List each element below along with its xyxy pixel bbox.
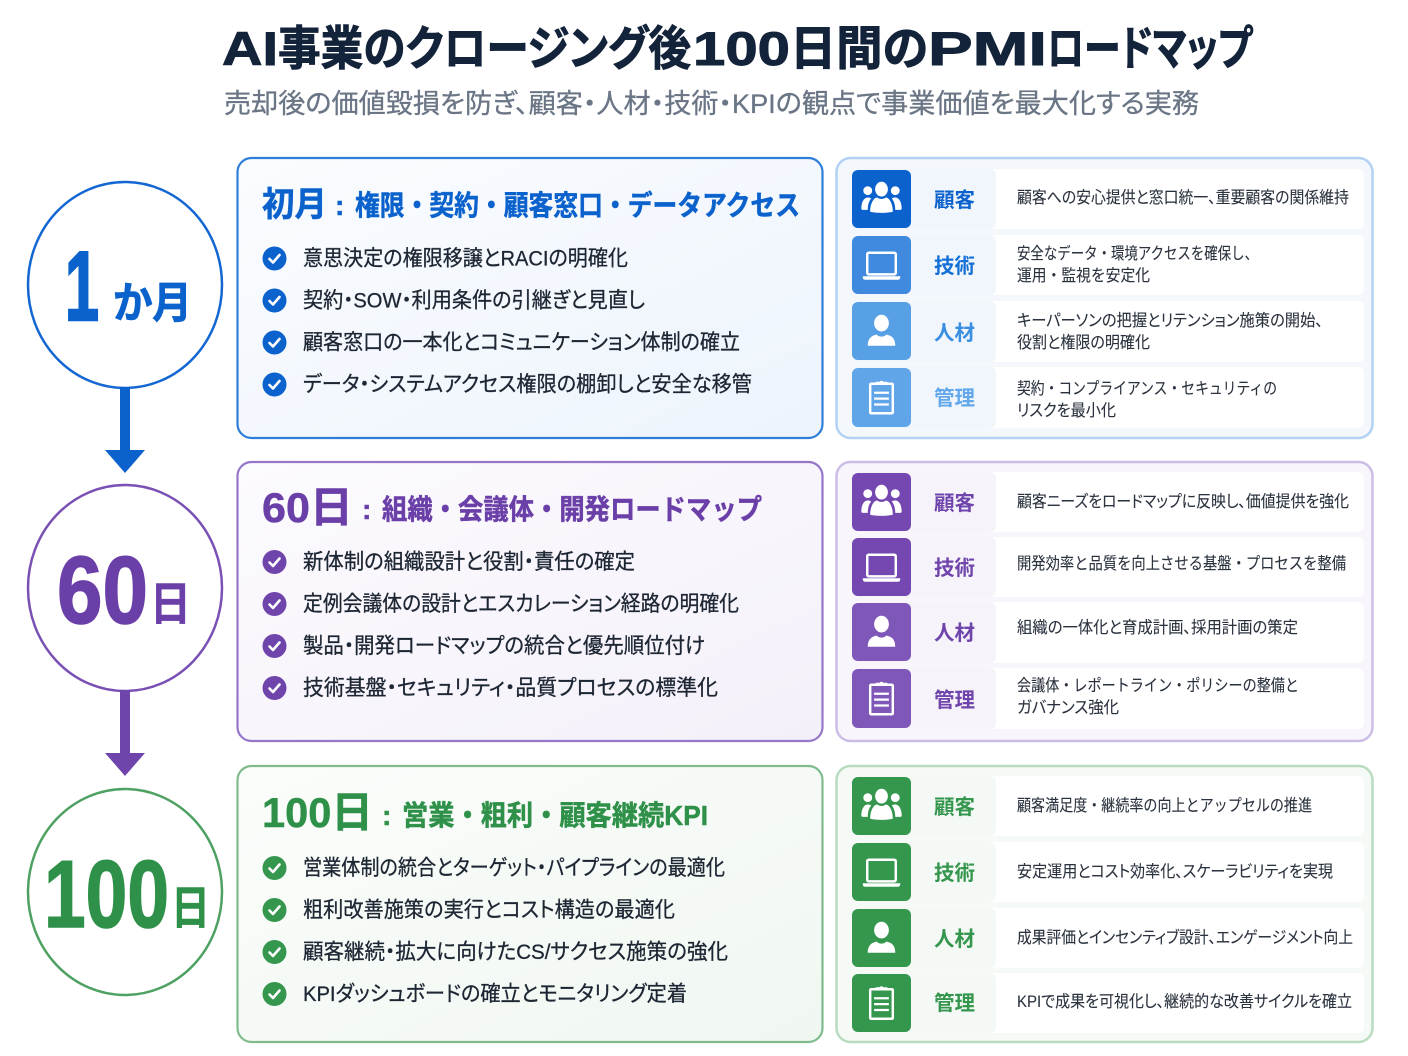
row: customer: 顧客: [934, 189, 975, 212]
row: management: 会議体・レポートライン・ポリシーの整備と: [1017, 676, 1299, 695]
heading: first month: :: [335, 190, 344, 221]
row: technology: [852, 235, 1364, 295]
check item 1: 営業体制の統合とターゲット・パイプラインの最適化: [303, 856, 725, 880]
heading: 60 days: [262, 484, 762, 531]
heading: 100 days: :: [382, 800, 391, 831]
check item 3: 顧客窓口の一本化とコミュニケーション体制の確立: [303, 330, 740, 354]
timeline: 1 month circle: 1: [65, 231, 99, 341]
row: management: KPIで成果を可視化し、継続的な改善サイクルを確立: [1017, 992, 1352, 1011]
check item 1: 意思決定の権限移譲とRACIの明確化: [303, 246, 628, 270]
heading: first month: 権限・契約・顧客窓口・データアクセス: [355, 189, 800, 221]
row: technology: 技術: [934, 556, 975, 580]
check item 4: KPIダッシュボードの確立とモニタリング定着: [303, 982, 687, 1006]
arrow: 1 month to 60 days: [105, 387, 145, 473]
row: management: [852, 973, 1364, 1033]
row: people: 人材: [934, 622, 975, 645]
timeline: 1 month circle: か月: [113, 280, 192, 328]
timeline: 100 days circle: 日: [171, 882, 210, 934]
heading: 60 days: 60日: [262, 484, 353, 531]
timeline: 1 month circle: [28, 182, 222, 388]
row: technology: 技術: [934, 254, 975, 278]
panel: 60 days checklist: [238, 462, 822, 741]
title: 事業のクロージング後: [278, 22, 691, 75]
row: technology: [852, 537, 1364, 597]
timeline: 60 days circle: 60: [57, 537, 148, 644]
row: people: 組織の一体化と育成計画、採用計画の策定: [1017, 618, 1298, 637]
row: technology: 安定運用とコスト効率化、スケーラビリティを実現: [1017, 862, 1333, 881]
panel: 60 days perspectives: [836, 462, 1372, 741]
heading: first month: [262, 186, 800, 224]
row: technology: 安全なデータ・環境アクセスを確保し、: [1017, 243, 1258, 263]
row: customer: 顧客: [934, 796, 975, 819]
row: management: [852, 367, 1364, 428]
row: people: [852, 908, 1364, 968]
row: technology: 開発効率と品質を向上させる基盤・プロセスを整備: [1017, 554, 1346, 573]
row: customer: [852, 776, 1364, 836]
row: people: [852, 602, 1364, 663]
heading: first month: 初月: [262, 186, 327, 224]
arrow: 60 days to 100 days: [105, 690, 145, 776]
row: management: [852, 668, 1364, 729]
check item 4: データ・システムアクセス権限の棚卸しと安全な移管: [303, 372, 752, 396]
check item 3: 製品・開発ロードマップの統合と優先順位付け: [303, 634, 705, 658]
panel: 100 days perspectives: [836, 766, 1372, 1042]
heading: 60 days: 組織・会議体・開発ロードマップ: [382, 494, 762, 525]
timeline: 100 days circle: 100: [44, 841, 169, 948]
row: customer: 顧客: [934, 492, 975, 515]
row: customer: 顧客満足度・継続率の向上とアップセルの推進: [1017, 796, 1312, 815]
title: 日間の: [790, 22, 928, 75]
row: technology: [852, 842, 1364, 902]
title: PMI: [928, 22, 1047, 75]
row: customer: [852, 169, 1364, 229]
row: people: 人材: [934, 928, 975, 951]
row: people: [852, 301, 1364, 362]
check item 2: 定例会議体の設計とエスカレーション経路の明確化: [303, 592, 739, 616]
row: technology: 技術: [934, 861, 975, 885]
heading: 100 days: 100日: [262, 789, 373, 836]
row: management: リスクを最小化: [1017, 401, 1116, 420]
check item 3: 顧客継続・拡大に向けたCS/サクセス施策の強化: [303, 940, 728, 964]
panel: first month perspectives: [836, 158, 1372, 438]
row: people: 人材: [934, 322, 975, 345]
subtitle: 売却後の価値毀損を防ぎ、顧客・人材・技術・KPIの観点で事業価値を最大化する実務: [224, 89, 1199, 119]
row: technology: 運用・監視を安定化: [1017, 266, 1150, 285]
timeline: 60 days circle: [28, 485, 222, 691]
title: [222, 22, 1254, 75]
panel: first month checklist: [238, 158, 822, 438]
row: management: 契約・コンプライアンス・セキュリティの: [1017, 379, 1277, 398]
timeline: 100 days circle: [28, 789, 222, 995]
title: AI: [222, 22, 278, 75]
row: management: ガバナンス強化: [1017, 698, 1119, 717]
panel: 100 days checklist: [238, 766, 822, 1042]
heading: 60 days: :: [362, 494, 371, 525]
check item 4: 技術基盤・セキュリティ・品質プロセスの標準化: [303, 676, 718, 700]
row: customer: 顧客への安心提供と窓口統一、重要顧客の関係維持: [1017, 188, 1349, 207]
check item 1: 新体制の組織設計と役割・責任の確定: [303, 550, 635, 574]
row: management: 管理: [934, 992, 975, 1015]
heading: 100 days: [262, 789, 708, 836]
row: management: 管理: [934, 689, 975, 712]
title: ロードマップ: [1047, 22, 1254, 75]
check item 2: 粗利改善施策の実行とコスト構造の最適化: [303, 898, 675, 922]
heading: 100 days: 営業・粗利・顧客継続KPI: [402, 800, 708, 831]
check item 2: 契約・SOW・利用条件の引継ぎと見直し: [303, 288, 645, 312]
row: customer: [852, 472, 1364, 532]
row: customer: 顧客ニーズをロードマップに反映し、価値提供を強化: [1017, 492, 1349, 511]
row: people: キーパーソンの把握とリテンション施策の開始、: [1017, 311, 1323, 330]
row: management: 管理: [934, 387, 975, 410]
row: people: 役割と権限の明確化: [1017, 333, 1150, 352]
title: 100: [693, 22, 790, 75]
row: people: 成果評価とインセンティブ設計、エンゲージメント向上: [1017, 927, 1353, 947]
timeline: 60 days circle: 日: [150, 578, 191, 630]
